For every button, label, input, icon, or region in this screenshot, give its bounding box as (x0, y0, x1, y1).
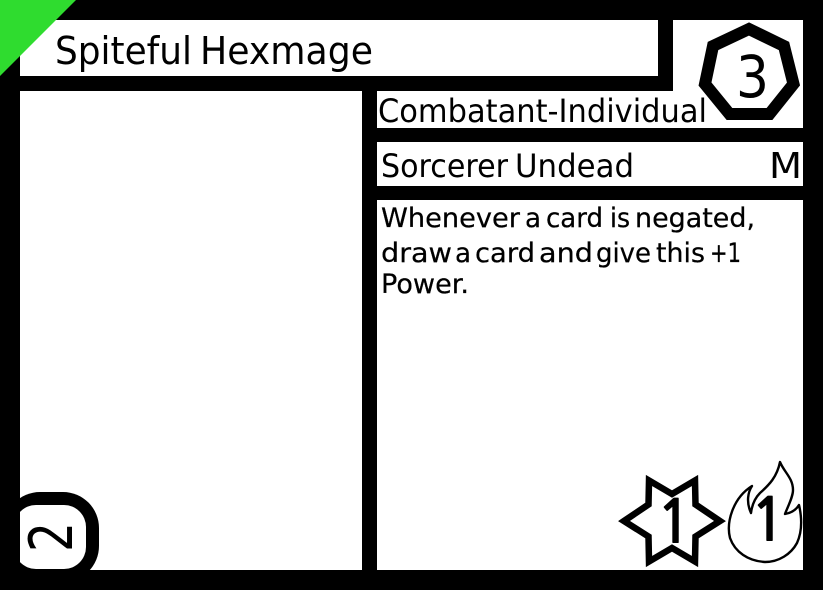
green corner marker (0, 0, 76, 76)
panel: type line: Combatant-Individual (378, 92, 707, 130)
panel: subtypes line (377, 142, 803, 187)
panel: rules text: +1 (710, 238, 741, 269)
icon: flame 1: 1 (750, 491, 786, 550)
panel: rules text: negated, (635, 203, 755, 234)
panel: subtypes line: Undead (515, 147, 634, 185)
icon: star power 1 (624, 480, 720, 562)
icon: rounded badge with rotated 2: 2 (17, 522, 87, 552)
icon: flame 1 (729, 462, 801, 562)
panel: rules text: Power. (381, 269, 469, 300)
icon: rounded badge with rotated 2 (20, 492, 99, 570)
panel: rules text: give (596, 238, 651, 269)
icon: heptagon cost 3 (705, 29, 794, 114)
panel: rules text: this (656, 238, 705, 269)
panel: art with cost badge (4, 91, 362, 582)
panel: rules text: and (539, 238, 593, 269)
panel: rules text: draw (381, 238, 452, 269)
panel: type line (377, 20, 803, 130)
icon: star power 1: 1 (656, 493, 692, 552)
panel: rules text: Whenever (381, 203, 521, 234)
panel: rules text: card (546, 203, 603, 234)
panel: title: Hexmage (200, 29, 373, 73)
panel: subtypes line: M (769, 146, 802, 187)
panel: rules text (377, 200, 803, 570)
panel: subtypes line: Sorcerer (381, 147, 509, 185)
panel: rules text: is (610, 203, 630, 234)
panel: title (20, 20, 658, 76)
icon: heptagon cost 3: 3 (736, 43, 769, 111)
panel: rules text: a (525, 203, 541, 234)
panel: title: Spiteful (55, 29, 192, 73)
panel: rules text: a (455, 238, 471, 269)
panel: rules text: card (475, 238, 535, 269)
